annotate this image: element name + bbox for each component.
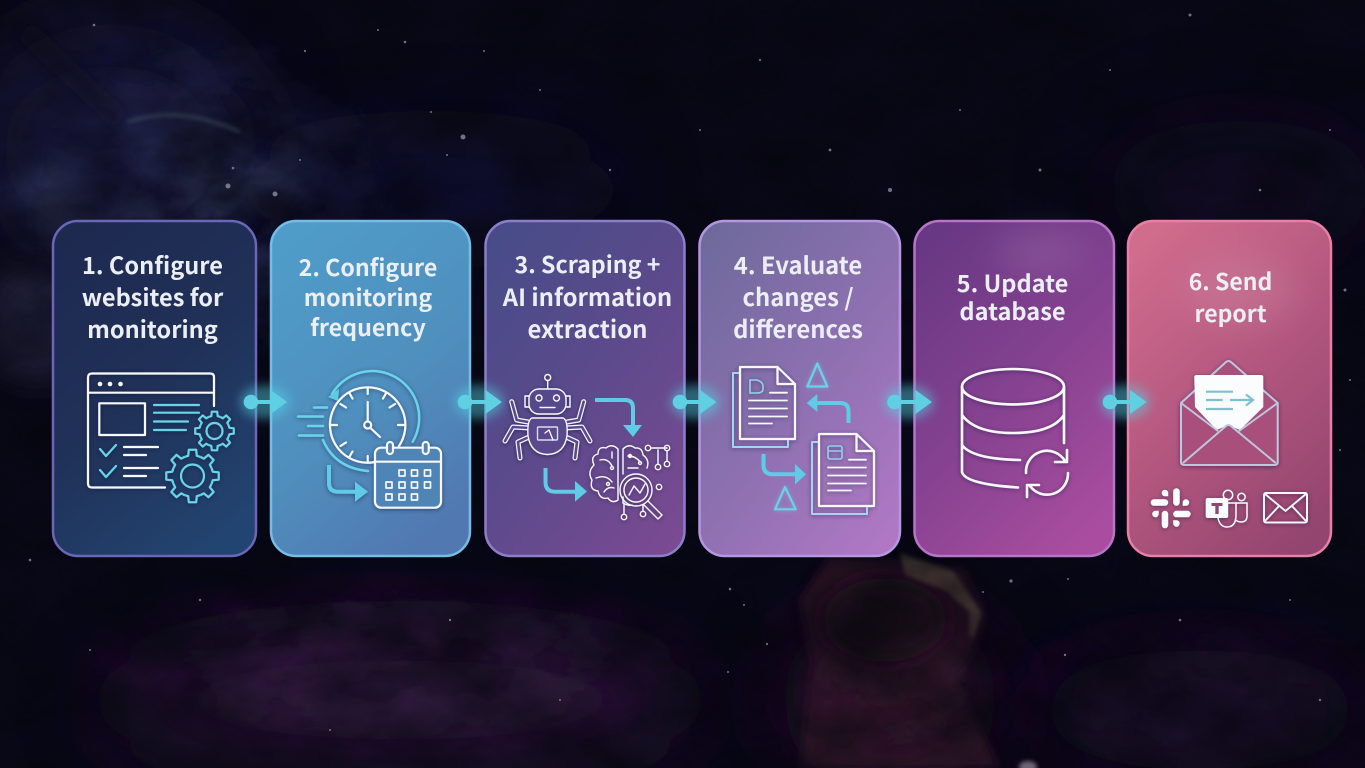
heading 3: extraction — [528, 310, 647, 345]
heading 2: monitoring — [304, 279, 432, 313]
icon: mail — [1264, 493, 1307, 522]
heading 2: frequency — [310, 309, 426, 343]
panel 4: evaluate changes — [700, 221, 900, 556]
arrow 3 to 4 — [670, 385, 720, 419]
heading 4: changes / — [742, 278, 854, 313]
heading 4: 4. Evaluate — [734, 246, 862, 281]
icon: delta triangles and arrows — [764, 364, 848, 509]
panel 1: configure websites — [53, 221, 256, 556]
heading 1: 1. Configure — [82, 247, 223, 281]
heading 2: 2. Configure — [299, 249, 437, 283]
icon: Slack — [1151, 488, 1191, 528]
icon: browser window with gears — [88, 374, 234, 502]
arrows to brain — [546, 400, 642, 502]
arrow 5 to 6 — [1100, 385, 1150, 419]
panel 3: scraping and AI extraction — [486, 221, 684, 556]
heading 3: AI information — [502, 278, 672, 313]
heading 4: differences — [733, 310, 863, 345]
panel 5: update database — [914, 221, 1114, 556]
heading 6: report — [1194, 295, 1267, 329]
panel 6: send report — [1128, 221, 1331, 556]
icon: robot spider — [505, 374, 590, 458]
arrow 4 to 5 — [884, 385, 934, 419]
icon: AI brain with magnifier — [590, 445, 670, 520]
arrow 1 to 2 — [240, 385, 290, 419]
panel 2: configure frequency — [271, 221, 470, 556]
heading 6: 6. Send — [1189, 263, 1272, 297]
heading 5: 5. Update — [957, 265, 1068, 299]
icon: database with sync — [962, 369, 1068, 497]
heading 1: websites for — [82, 279, 224, 313]
icon: Teams — [1206, 490, 1247, 527]
icon: clock and calendar — [298, 371, 441, 508]
icon: open envelope with letter — [1181, 361, 1278, 465]
arrow 2 to 3 — [454, 385, 504, 419]
heading 1: monitoring — [87, 311, 218, 345]
icon: two compared documents — [733, 367, 874, 514]
heading 5: database — [959, 293, 1066, 327]
heading 3: 3. Scraping + — [515, 246, 660, 280]
